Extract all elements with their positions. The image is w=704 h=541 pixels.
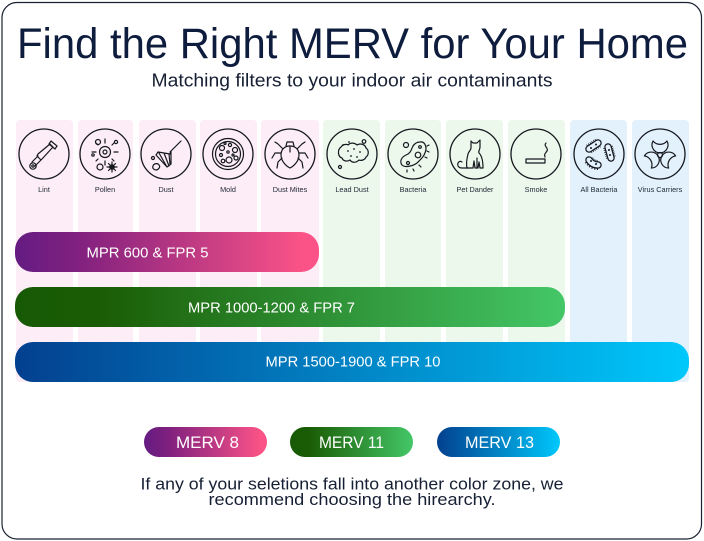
legend: MERV 8: MERV 8 bbox=[176, 433, 239, 452]
bar: MPR 1000-1200 & FPR 7 bbox=[15, 287, 565, 327]
icon: biohazard virus bbox=[635, 129, 685, 194]
icon: lead dust cloud: Lead Dust bbox=[335, 185, 369, 194]
legend: MERV 8 bbox=[144, 427, 267, 457]
icon: lead dust cloud bbox=[327, 129, 377, 194]
icon: cat bbox=[450, 129, 500, 194]
footer note: If any of your seletions fall into another color zone, we bbox=[140, 474, 564, 494]
icon: duster bbox=[141, 129, 191, 194]
icon: pollen: Pollen bbox=[95, 185, 115, 194]
icon: lint roller bbox=[19, 129, 69, 194]
panel: pink contaminant zone bbox=[16, 120, 319, 382]
icon: bacteria bbox=[388, 129, 438, 194]
footer note bbox=[140, 474, 564, 509]
icon: mold petri dish: Mold bbox=[220, 185, 236, 194]
icon: bacteria: Bacteria bbox=[400, 185, 427, 194]
bar: MPR 600 & FPR 5 bbox=[15, 232, 319, 272]
title: Find the Right MERV for Your Home bbox=[17, 20, 688, 68]
icon: cat: Pet Dander bbox=[457, 185, 494, 194]
icon: mold petri dish bbox=[203, 129, 253, 194]
icon: all bacteria: All Bacteria bbox=[581, 185, 618, 194]
subtitle: Matching filters to your indoor air contaminants bbox=[152, 70, 552, 90]
legend: MERV 11 bbox=[290, 427, 413, 457]
icon: dust mite bbox=[265, 129, 315, 194]
icon: pollen bbox=[80, 129, 130, 194]
icon: all bacteria bbox=[574, 129, 624, 194]
panel: blue contaminant zone bbox=[570, 120, 689, 382]
footer note: recommend choosing the hirearchy. bbox=[208, 490, 495, 509]
bar: MPR 1000-1200 & FPR 7: MPR 1000-1200 & FPR 7 bbox=[188, 300, 355, 316]
legend: MERV 13: MERV 13 bbox=[465, 433, 534, 452]
bar: MPR 600 & FPR 5: MPR 600 & FPR 5 bbox=[86, 246, 208, 262]
bar: MPR 1500-1900 & FPR 10: MPR 1500-1900 & FPR 10 bbox=[266, 354, 440, 370]
legend: MERV 11: MERV 11 bbox=[319, 433, 384, 452]
bar: MPR 1500-1900 & FPR 10 bbox=[15, 342, 689, 382]
icon: lint roller: Lint bbox=[38, 185, 50, 194]
icon: duster: Dust bbox=[158, 185, 174, 194]
icon: cigarette: Smoke bbox=[525, 185, 547, 194]
icon: biohazard virus: Virus Carriers bbox=[638, 185, 683, 194]
panel: green contaminant zone bbox=[323, 120, 565, 382]
legend: MERV 13 bbox=[437, 427, 560, 457]
icon: dust mite: Dust Mites bbox=[273, 185, 308, 194]
icon: cigarette bbox=[511, 129, 561, 194]
